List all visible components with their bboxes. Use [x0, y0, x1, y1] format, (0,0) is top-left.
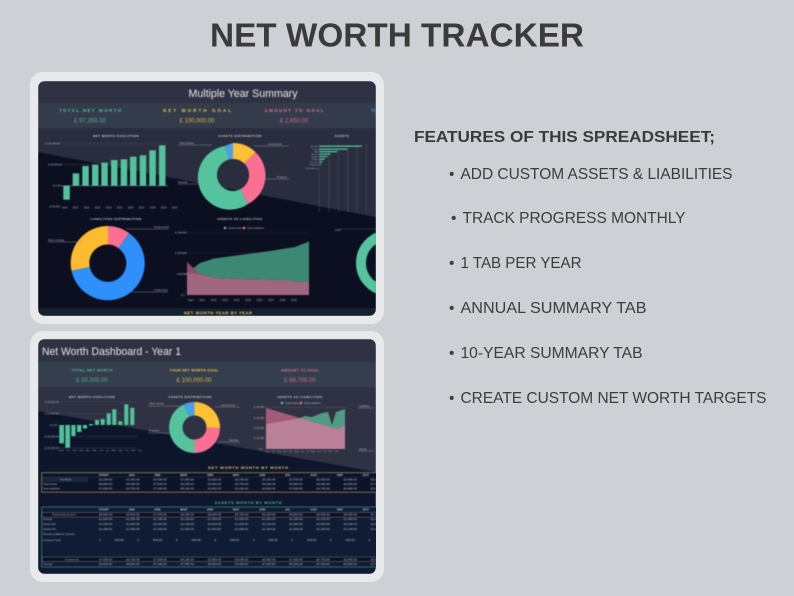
table: assets month by month: £7,600.00 £6,700.00 £7,000.00 £8,100.00 £3,900.00 £6,200.00 £3,900.00 £7,900.00 £4,700.00 £6,800.00 £5,300.00 [99, 558, 384, 562]
assets horizontal bar chart: Savings [310, 146, 319, 148]
feature: tab per year: 1 TAB PER YEAR [460, 255, 582, 272]
liabilities distribution donut: Student Debt [154, 225, 169, 229]
feature: annual summary: ANNUAL SUMMARY TAB [460, 300, 646, 317]
table: assets month by month: £3,200.00 £3,200.00 £2,900.00 £2,100.00 £2,000.00 £1,900.00 £2,100.00 £1,900.00 £2,400.00 £2,200.00 £2,500.00 [99, 522, 384, 526]
net worth evolution bar chart: £ 20,000.00 [45, 400, 59, 404]
assets distribution donut: Savings [229, 438, 239, 442]
assets vs liabilities area chart: Start 2021 2022 2023 2024 2025 2026 2027 2028 2029 [188, 298, 297, 302]
net worth evolution bar chart: -£ 10,000.00 [44, 434, 59, 438]
features heading: FEATURES OF THIS SPREADSHEET; [414, 129, 715, 146]
net worth evolution bar chart: £ 0.00 [50, 423, 58, 427]
table: net worth month by month: START JAN FEB MAR APR MAY JUN JUL AUG SEP OCT NOV [99, 473, 395, 477]
table: net worth month by month: Total Liabilities [43, 486, 61, 490]
table: assets month by month: £8,800.00 £8,500.00 £7,500.00 £6,200.00 £5,900.00 £5,700.00 £6,300.00 £5,800.00 £6,900.00 £6,400.00 £7,100.00 [99, 512, 384, 516]
assets vs liabilities area chart: £ 0 [259, 447, 263, 451]
assets horizontal bar chart: Property [310, 164, 319, 166]
table: net worth month by month [42, 473, 395, 492]
feature: custom assets: • [449, 166, 454, 183]
cropped green donut [355, 232, 376, 294]
assets horizontal bar chart [305, 134, 376, 232]
KPI band: £ 30,300.00 [76, 378, 109, 384]
net worth evolution bar chart: Start 2021 2022 2023 2024 2025 2026 2027 2028 2029 2030 [62, 206, 178, 210]
liabilities distribution donut: Credit Card [154, 288, 168, 292]
assets horizontal bar chart: Crypto [312, 158, 319, 161]
assets vs liabilities area chart: £ 0 [181, 293, 185, 297]
heading: net worth month by month: NET WORTH MONTH BY MONTH [208, 465, 288, 470]
KPI band: TOTAL [371, 108, 386, 113]
table: assets month by month: £1,400.00 £1,500.00 £1,300.00 £1,000.00 £1,000.00 £1,000.00 £1,100.00 £1,000.00 £1,200.00 £1,100.00 £1,300.00 [99, 527, 384, 531]
feature: 10-year summary: 10-YEAR SUMMARY TAB [460, 345, 642, 362]
assets distribution donut: Property [149, 428, 160, 432]
feature list [449, 166, 766, 407]
assets distribution donut: Property [277, 175, 288, 179]
section band: net worth year by year [38, 308, 376, 316]
section band: net worth year by year: NET WORTH YEAR BY YEAR [184, 310, 252, 316]
liabilities distribution donut: LIABILITIES DISTRIBUTION [90, 217, 142, 221]
assets distribution donut: Other Assets [179, 141, 195, 145]
assets distribution donut: ASSETS DISTRIBUTION [168, 395, 212, 399]
assets horizontal bar chart: Bonds [312, 156, 319, 158]
net worth evolution bar chart [45, 134, 178, 210]
table: assets month by month: £ 500.00 £ 500.00 £ 500.00 £ 500.00 £ 500.00 £ 500.00 £ 500.00 £ 500.00 £ 500.00 £ 500.00 £ 500.00 [99, 538, 509, 542]
table: assets month by month: Total Assets Account [52, 512, 76, 516]
assets vs liabilities area chart [175, 217, 310, 302]
table: net worth month by month: Net Worth [60, 478, 72, 482]
assets horizontal bar chart: ISA [314, 150, 319, 154]
screen title: Net Worth Dashboard - Year 1 [42, 346, 181, 358]
KPI band: AMOUNT TO GOAL [264, 108, 324, 113]
assets horizontal bar chart: Pension [310, 162, 319, 164]
assets vs liabilities area chart: Total Liabilities [247, 226, 265, 230]
KPI band: AMOUNT TO GOAL [281, 368, 320, 372]
assets vs liabilities area chart: Total Assets [228, 226, 243, 230]
KPI band: £ 2,650.00 [280, 118, 309, 124]
assets distribution donut: Investments [221, 403, 236, 407]
net worth evolution bar chart: NET WORTH EVOLUTION [93, 134, 139, 138]
assets distribution donut [178, 134, 289, 210]
assets distribution donut: Investments [268, 142, 283, 146]
table: assets month by month: START JAN FEB MAR APR MAY JUN JUL AUG SEP OCT NOV [99, 508, 395, 512]
KPI band: NET WORTH GOAL [163, 108, 231, 113]
net worth evolution bar chart: £ 0.00 [53, 184, 61, 188]
table: assets month by month: Savings [43, 562, 53, 566]
assets distribution donut: Other Assets [149, 402, 165, 406]
assets horizontal bar chart: ASSETS [334, 134, 350, 138]
net worth evolution bar chart: -£ 50,000 [49, 204, 61, 208]
feature: track progress: TRACK PROGRESS MONTHLY [462, 210, 686, 227]
assets horizontal bar chart: Stocks [311, 153, 319, 156]
table: assets month by month: Payments Balance (House) [43, 532, 75, 536]
table: assets month by month: Stocks ISA [43, 527, 56, 531]
screen title: Multiple Year Summary [188, 88, 298, 100]
net worth evolution bar chart: -£ 20,000.00 [44, 446, 59, 450]
assets vs liabilities area chart: £ 10,000 [254, 436, 265, 440]
net worth evolution bar chart: Start Jan Feb Mar Apr May Jun Jul Aug Sep Oct Nov Dec [59, 449, 143, 452]
table: assets month by month: £1,200.00 £1,300.00 £1,200.00 £1,100.00 £1,200.00 £1,200.00 £1,300.00 £1,200.00 £1,100.00 £1,200.00 £1,200.00 [99, 517, 384, 521]
assets vs liabilities area chart: £ 40,000 [254, 405, 265, 409]
assets vs liabilities area chart: £ 150,000 [175, 230, 187, 234]
net worth evolution bar chart: £ 10,000.00 [45, 412, 59, 416]
net worth evolution bar chart: £ 50,000.00 [48, 162, 62, 166]
table: net worth month by month: £7,600.00 £6,700.00 £7,000.00 £8,100.00 £3,900.00 £6,200.00 £3,900.00 £7,900.00 £4,700.00 £6,800.00 £5,300.00 [99, 486, 384, 490]
table: assets month by month: Investments [65, 558, 80, 562]
KPI band: YOUR NET WORTH GOAL [170, 368, 219, 372]
assets vs liabilities area chart: Start Jan Feb Mar Apr May Jun Jul Aug Sep Oct Nov Dec [265, 450, 339, 453]
KPI band: £ 100,000.00 [176, 378, 212, 384]
assets vs liabilities area chart [254, 395, 374, 453]
table: net worth month by month: Total Assets [43, 482, 58, 486]
title: NET WORTH TRACKER [210, 18, 584, 54]
assets vs liabilities area chart: ASSETS VS LIABILITIES [217, 217, 263, 221]
table: net worth month by month: £8,800.00 £8,400.00 £7,500.00 £6,200.00 £5,900.00 £5,700.00 £6,300.00 £5,800.00 £6,900.00 £6,400.00 £7,100.00 [99, 482, 384, 486]
KPI band [38, 103, 386, 128]
KPI band: £ 100,000.00 [179, 118, 215, 124]
net worth evolution bar chart [44, 395, 143, 452]
table: assets month by month: Company Fund [43, 538, 61, 542]
table: assets month by month [40, 506, 376, 568]
assets distribution donut: Savings [178, 180, 188, 184]
table: assets month by month: Stocks ISA [43, 522, 56, 526]
net worth evolution bar chart: NET WORTH EVOLUTION [69, 395, 115, 399]
assets vs liabilities area chart: £ 30,000 [254, 416, 265, 420]
assets vs liabilities area chart: Total Assets [285, 401, 300, 405]
feature: tab per year: • [449, 255, 454, 272]
assets horizontal bar chart: Other Assets [305, 167, 319, 170]
KPI band: £ 69,700.00 [284, 378, 317, 384]
assets horizontal bar chart: Cash [313, 149, 319, 151]
table: assets month by month: Savings [43, 517, 53, 521]
feature: custom assets: ADD CUSTOM ASSETS & LIABILITIES [460, 166, 732, 183]
assets horizontal bar chart: 3.5% [335, 228, 342, 232]
KPI band: TOTAL NET WORTH [72, 368, 113, 372]
feature: 10-year summary: • [449, 345, 454, 362]
table: net worth month by month: £3,200.00 £3,700.00 £4,500.00 £7,000.00 £3,900.00 £3,300.00 £5,100.00 £3,700.00 £6,300.00 £2,900.00 £5,200.00 [99, 478, 384, 482]
panel: multiple year summary tablet [30, 72, 417, 324]
feature: custom targets: • [449, 390, 454, 407]
liabilities distribution donut [48, 217, 169, 300]
panel: net worth dashboard tablet [30, 331, 384, 582]
feature: track progress: • [451, 210, 456, 227]
feature: custom targets: CREATE CUSTOM NET WORTH TARGETS [460, 390, 766, 407]
KPI band: TOTAL NET WORTH [59, 108, 121, 113]
KPI band: £ 97,350.00 [74, 118, 107, 124]
assets vs liabilities area chart: ASSETS VS LIABILITIES [277, 395, 323, 399]
assets distribution donut: ASSETS DISTRIBUTION [218, 134, 262, 138]
assets vs liabilities area chart: Assets [359, 447, 367, 451]
feature: annual summary: • [449, 300, 454, 317]
net worth evolution bar chart: £ 100,000.00 [45, 142, 61, 146]
assets distribution donut [148, 395, 240, 453]
assets vs liabilities area chart: Liabilities [359, 404, 370, 408]
KPI band [38, 362, 376, 387]
table: assets month by month: £8,500.00 £8,000.00 £7,900.00 £7,500.00 £6,800.00 £6,500.00 £7,200.00 £6,600.00 £7,300.00 £6,900.00 £7,400.00 [99, 562, 384, 566]
heading: assets month by month: ASSETS MONTH BY MONTH [214, 500, 282, 505]
liabilities distribution donut: Store Lending [48, 238, 65, 242]
assets vs liabilities area chart: £ 20,000 [254, 426, 265, 430]
assets vs liabilities area chart: £ 100,000 [175, 251, 187, 255]
assets vs liabilities area chart: Total Liabilities [304, 401, 322, 405]
assets vs liabilities area chart: £ 50,000 [177, 272, 188, 276]
